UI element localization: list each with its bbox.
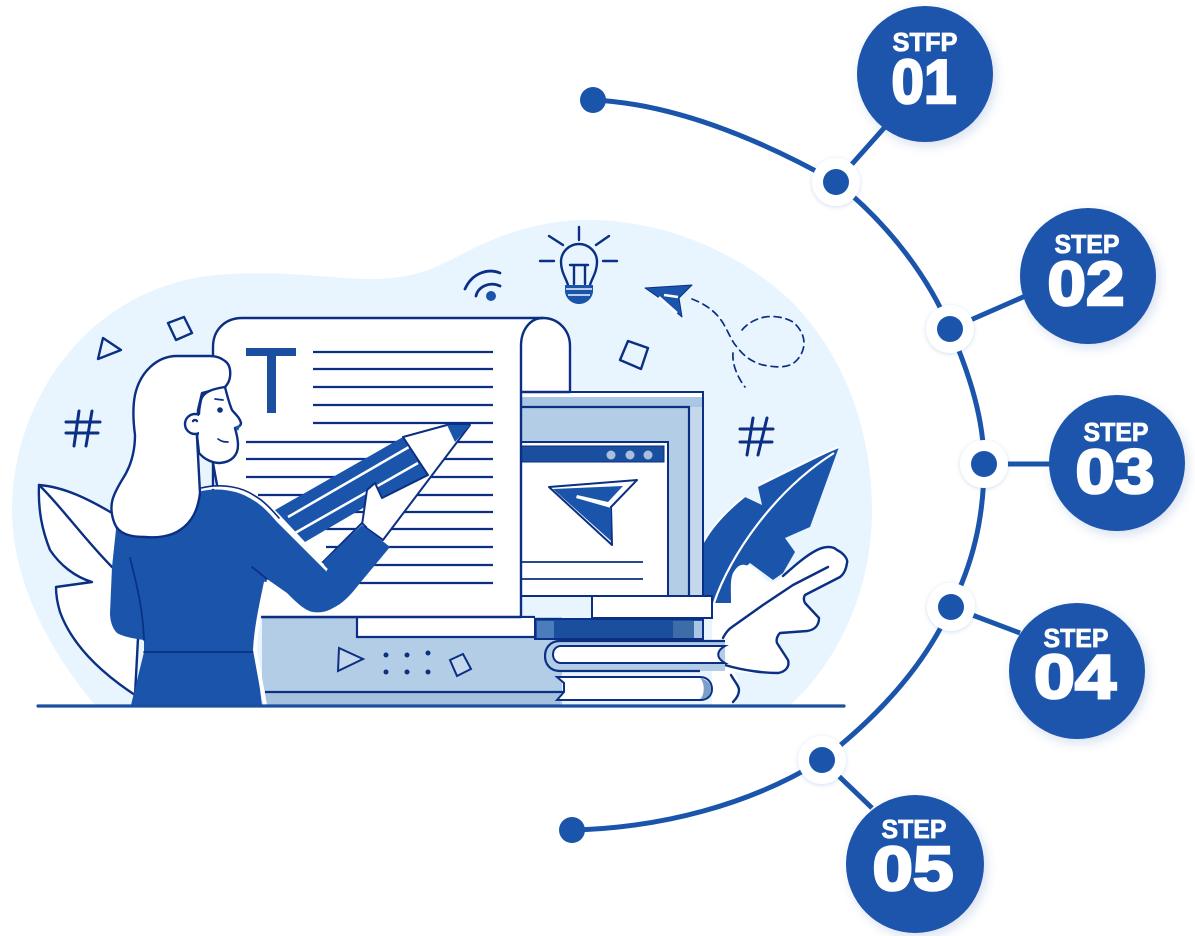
node 2 [926, 305, 974, 353]
eye and smile [215, 399, 228, 442]
laptop play icon [338, 648, 363, 671]
splash inner line [723, 567, 828, 638]
laptop screen [521, 392, 703, 597]
step 1 badge: 01 [892, 48, 956, 117]
face [197, 387, 241, 463]
neck [213, 463, 217, 485]
icon: hash left [66, 411, 100, 446]
sleeve and body [110, 489, 390, 705]
books [535, 547, 847, 705]
step 1 badge: STFP [892, 27, 958, 57]
step 1 badge [857, 6, 993, 142]
laptop base [262, 617, 563, 705]
text lines [246, 352, 493, 583]
node 3 [960, 440, 1008, 488]
timeline arc [572, 100, 984, 830]
node 1 [812, 158, 860, 206]
icon: square [168, 317, 192, 340]
body details [130, 558, 267, 652]
icon: square right [620, 341, 648, 369]
laptop [262, 392, 703, 705]
dark book [535, 619, 703, 639]
hair [111, 356, 230, 537]
step 4 badge: 04 [1034, 643, 1117, 712]
big letter T [246, 348, 296, 413]
node 4 [927, 583, 975, 631]
document page [213, 318, 570, 617]
step 2 badge [1020, 208, 1156, 344]
step 4 badge: STEP [1044, 623, 1108, 653]
step 2 badge: STEP [1054, 229, 1120, 259]
background blob [12, 220, 872, 705]
icon: left leaf [39, 485, 140, 695]
arc end dot bottom [559, 817, 585, 843]
feather [704, 447, 839, 603]
icon: wifi [465, 271, 500, 301]
woman [110, 356, 390, 705]
ground line [38, 704, 844, 708]
step 5 badge [846, 795, 984, 933]
laptop dots [384, 650, 430, 674]
step 2 badge: 02 [1048, 250, 1124, 319]
step 4 badge [1009, 603, 1145, 739]
connectors [822, 127, 1055, 808]
illustration: writer at document [38, 227, 847, 706]
step 3 badge [1049, 395, 1185, 531]
step 5 badge: 05 [872, 835, 954, 904]
ear [185, 414, 205, 434]
laptop square icon [450, 654, 471, 676]
icon: light bulb [540, 227, 617, 304]
node 5 [798, 736, 846, 784]
pencil [275, 425, 470, 567]
icon: triangle [98, 338, 121, 359]
screen paper plane [549, 480, 637, 545]
white splash fill [712, 547, 847, 705]
step 3 badge: STEP [1084, 417, 1148, 447]
step 5 badge: STEP [882, 814, 946, 844]
step 3 badge: 03 [1076, 438, 1154, 507]
icon: hash right [740, 418, 773, 455]
third book [545, 641, 725, 671]
fourth book [557, 677, 712, 700]
splash outline [725, 547, 847, 673]
top book [592, 596, 712, 618]
arc end dot top [580, 87, 606, 113]
icon: paper plane with dashed trail [645, 285, 804, 387]
swirl line [731, 675, 739, 702]
